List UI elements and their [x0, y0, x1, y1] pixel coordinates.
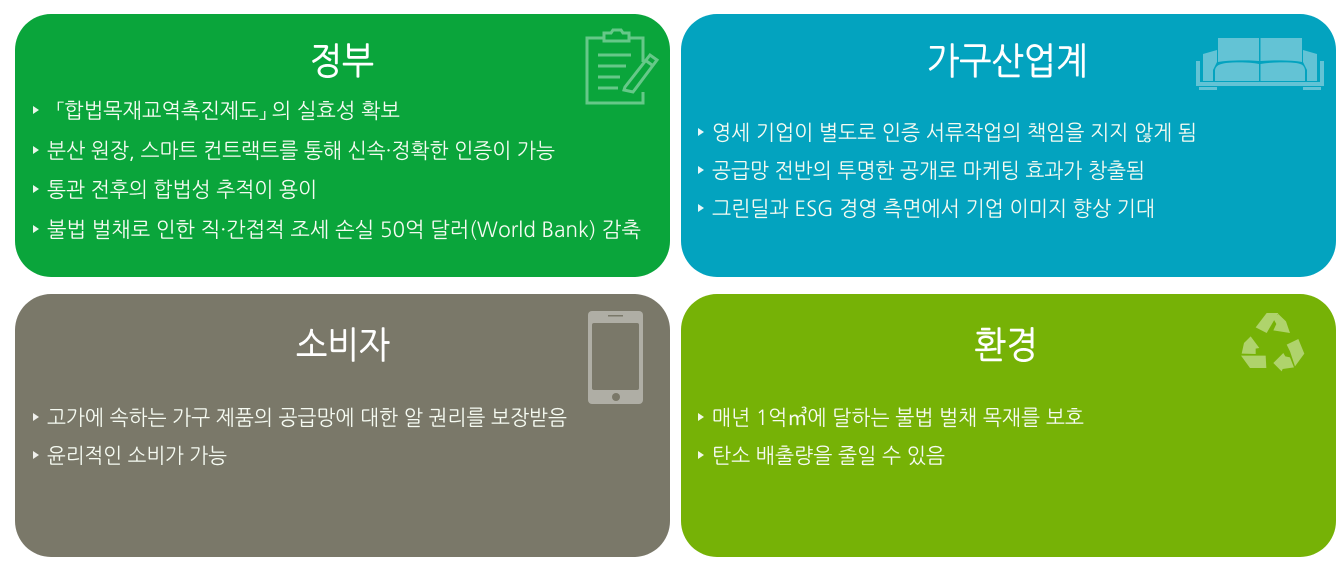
text: government 4: 불법 벌채로 인한 직·간접적 조세 손실 50억 달러(World Bank) 감축 [47, 219, 641, 241]
text: government 3: 통관 전후의 합법성 추적이 용이 [47, 179, 317, 201]
bullet: government 3 [33, 185, 39, 193]
panel: environment [681, 294, 1336, 557]
icon: recycling arrows [1241, 313, 1304, 371]
icon: clipboard and pencil [587, 30, 657, 103]
text: industry 1: 영세 기업이 별도로 인증 서류작업의 책임을 지지 않게 됨 [712, 122, 1197, 144]
text: consumers 1: 고가에 속하는 가구 제품의 공급망에 대한 알 권리를 보장받음 [47, 407, 567, 429]
bullet: industry 1 [698, 128, 704, 136]
bullet: industry 2 [698, 166, 704, 174]
panel: furniture industry [681, 14, 1336, 277]
bullet: consumers 1 [33, 413, 39, 421]
icon: smartphone [588, 311, 643, 404]
bullet: environment 1 [698, 413, 704, 421]
bullet: environment 2 [698, 451, 704, 459]
heading: consumers: 소비자 [296, 327, 390, 364]
text: environment 1: 매년 1억㎥에 달하는 불법 벌채 목재를 보호 [712, 406, 1084, 429]
bullet: government 2 [33, 146, 39, 154]
text: industry 2: 공급망 전반의 투명한 공개로 마케팅 효과가 창출됨 [712, 160, 1145, 182]
bullet: industry 3 [698, 204, 704, 212]
text: government 1: 「합법목재교역촉진제도」 의 실효성 확보 [57, 100, 400, 122]
text: industry 3: 그린딜과 ESG 경영 측면에서 기업 이미지 향상 기대 [712, 198, 1155, 220]
text: government 2: 분산 원장, 스마트 컨트랙트를 통해 신속·정확한 인증이 가능 [47, 140, 555, 162]
heading: government: 정부 [310, 43, 374, 80]
bullet: consumers 2 [33, 451, 39, 459]
bullet: government 1 [33, 106, 39, 114]
panel: consumers [15, 294, 670, 557]
bullet: government 4 [33, 225, 39, 233]
heading: environment: 환경 [974, 327, 1038, 364]
panel: government [15, 14, 670, 277]
text: environment 2: 탄소 배출량을 줄일 수 있음 [712, 445, 945, 467]
heading: furniture industry: 가구산업계 [927, 43, 1088, 80]
icon: sofa [1196, 38, 1324, 90]
text: consumers 2: 윤리적인 소비가 가능 [47, 445, 227, 467]
